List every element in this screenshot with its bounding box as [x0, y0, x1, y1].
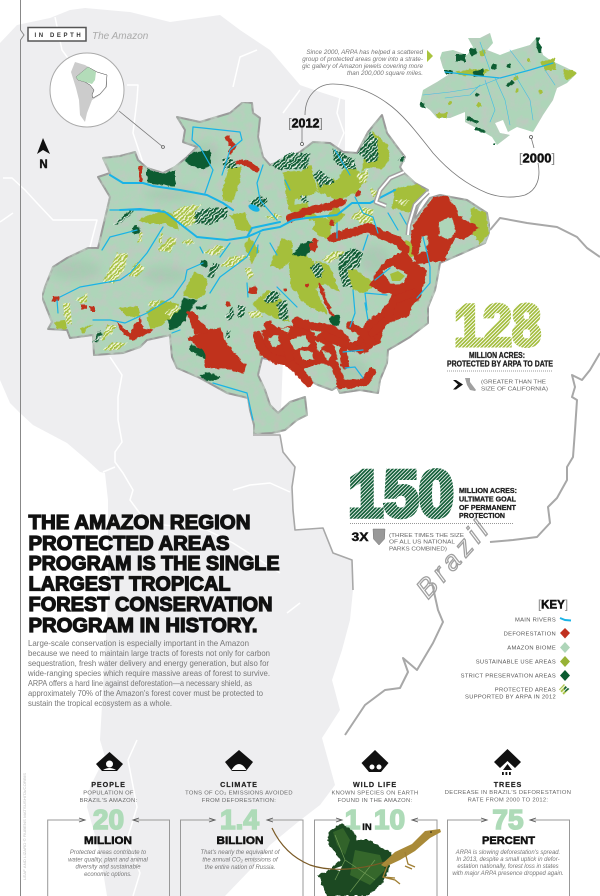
strict preservation areas: [132, 150, 340, 381]
curved connector between maps: [305, 84, 539, 197]
stat: 150 million acres: ULTIMATE GOAL: [459, 494, 517, 504]
key: sustainable use areas: SUSTAINABLE USE AREAS: [476, 660, 556, 666]
stat column: climate: FROM DEFORESTATION:: [202, 798, 276, 804]
stat column: people: Protected areas contribute to: [70, 850, 147, 856]
stat: 150 million acres: 150: [348, 456, 454, 530]
icon: wild life: [362, 750, 388, 772]
stat: 150 million acres: OF PERMANENT: [459, 503, 517, 512]
stat column: climate: 1.4: [220, 804, 259, 835]
section tag: In Depth: [28, 28, 149, 42]
green holes inside deforestation: [268, 217, 456, 362]
estuary channels: [376, 172, 428, 235]
handwritten country label: Brazil: [410, 515, 495, 604]
stat column: trees: PERCENT: [482, 835, 535, 847]
stat column: climate: [180, 750, 303, 896]
stat: 128 million acres: SIZE OF CALIFORNIA): [481, 386, 548, 392]
key: protected areas supported by ARPA: PROTECTED AREAS: [495, 688, 556, 694]
label: 2012: [2012]: [288, 116, 323, 130]
stat column: climate: That's nearly the equivalent of: [200, 850, 281, 856]
stat column: trees: TREES: [494, 780, 522, 789]
stat: 128 million acres: [447, 294, 553, 392]
icon: north arrow: [37, 138, 50, 171]
locator globe with South America: [50, 53, 164, 148]
illustration: leaf: [318, 823, 393, 896]
stat column: wild life: 10: [374, 804, 405, 835]
caption: since 2000: gic gallery of Amazon jewels covering more: [302, 63, 423, 70]
stat column: climate: the annual CO₂ emissions of: [202, 858, 279, 864]
stat column: climate: BILLION: [216, 835, 264, 847]
stat column: trees: 75: [492, 804, 524, 835]
lime patch in red hole: [390, 271, 405, 281]
protected areas supported by ARPA: light hatch: [63, 170, 410, 350]
stat column: wild life: IN: [362, 822, 372, 833]
section tag: In Depth: The Amazon: [92, 31, 149, 42]
stat column: people: BRAZIL'S AMAZON:: [80, 798, 137, 804]
stat column: people: diversity and sustainable: [75, 864, 141, 870]
key: deforestation: DEFORESTATION: [504, 632, 556, 638]
stat: 150 million acres: [348, 456, 517, 552]
headline: THE AMAZON REGION: [28, 511, 250, 534]
deforestation: [52, 138, 479, 385]
icon: climate: [225, 750, 253, 771]
background land: neighbouring countries: [0, 8, 353, 896]
stat column: trees: RATE FROM 2000 TO 2012:: [468, 798, 548, 804]
stat column: trees: estation nationally, forest loss in states: [457, 864, 559, 870]
stat: 128 million acres: MILLION ACRES:: [469, 351, 525, 360]
small map: 2000: [420, 33, 577, 146]
key: protected areas supported by ARPA: SUPPORTED BY ARPA IN 2012: [465, 694, 556, 700]
body paragraph: wide-ranging species which require massive areas of forest to survive.: [27, 668, 270, 678]
stat column: wild life: 1: [345, 804, 360, 835]
stat column: people: PEOPLE: [91, 780, 126, 789]
body paragraph: Large-scale conservation is especially important in the Amazon: [28, 638, 249, 648]
stat: 128 million acres: (GREATER THAN THE: [481, 380, 546, 386]
main rivers: [57, 127, 430, 420]
stat: 150 million acres: (THREE TIMES THE SIZE: [389, 533, 464, 539]
stat column: people: MILLION: [84, 835, 132, 847]
main map: Amazon biome 2012: [42, 102, 490, 434]
strict areas 2000: [420, 38, 542, 146]
stat column: people: 20: [93, 804, 124, 835]
label: 2000: [519, 136, 555, 166]
headline: FOREST CONSERVATION: [28, 593, 272, 616]
stat: 150 million acres: PARKS COMBINED): [389, 546, 447, 552]
stat column: wild life: WILD LIFE: [353, 780, 397, 789]
headline: PROGRAM IN HISTORY.: [28, 614, 258, 637]
headline: [28, 511, 280, 637]
stat column: trees: DECREASE IN BRAZIL'S DEFORESTATION: [445, 790, 571, 796]
sustainable use areas: [54, 131, 489, 333]
stat: 150 million acres: PROTECTION: [459, 511, 505, 520]
icon: national park badge: [373, 529, 385, 545]
map key: [KEY]: [538, 600, 568, 612]
stat column: people: POPULATION OF: [83, 790, 134, 796]
stat column: climate: the entire nation of Russia.: [205, 865, 275, 871]
icon: people: [96, 752, 123, 771]
amazon biome shape: [42, 102, 490, 434]
stat column: climate: TONS OF CO₂ EMISSIONS AVOIDED: [185, 790, 293, 796]
photo credit: LEAF AND LIZARD © RUBENS MATSUSHITA/CORBIS: [22, 773, 27, 880]
icon: north arrow: N: [39, 159, 48, 171]
sustainable areas 2000: [436, 50, 577, 118]
headline: LARGEST TROPICAL: [28, 572, 230, 596]
label: 2000: [2000]: [519, 150, 555, 166]
stat column: trees: with major ARPA presence dropped again.: [452, 871, 564, 877]
section tag: In Depth: IN DEPTH: [34, 33, 83, 39]
stat column: wild life: FOUND IN THE AMAZON:: [338, 798, 412, 804]
stat: 150 million acres: MILLION ACRES:: [459, 486, 517, 495]
caption: since 2000: [302, 49, 423, 77]
illustration: lizard: [272, 828, 441, 884]
icon: greater than chevron: [453, 380, 463, 390]
map key: [461, 600, 571, 700]
headline: PROGRAM IS THE SINGLE: [28, 552, 280, 575]
protected areas supported by ARPA: dark hatch: [93, 132, 405, 343]
stat column: climate: CLIMATE: [220, 780, 258, 789]
left margin rule: [20, 0, 24, 896]
caption: since 2000: Since 2000, ARPA has helped a scattered: [306, 49, 423, 56]
stat column: people: [48, 752, 170, 896]
icon: California: [465, 378, 476, 391]
stat: 150 million acres: OF ALL US NATIONAL: [389, 540, 456, 546]
body paragraph: [27, 638, 270, 708]
caption: since 2000: group of protected areas grow into a strate-: [302, 56, 423, 63]
stat column: wild life: [314, 750, 437, 896]
body paragraph: sustain the tropical ecosystem as a whole.: [28, 698, 172, 708]
body paragraph: sequestration, fresh water delivery and energy generation, but also for: [28, 658, 269, 668]
stat column: wild life: KNOWN SPECIES ON EARTH: [331, 790, 419, 796]
key: strict preservation areas: STRICT PRESERVATION AREAS: [461, 674, 556, 680]
stat: 128 million acres: PROTECTED BY ARPA TO DATE: [447, 360, 553, 368]
biome darker forest shading: [60, 150, 384, 375]
stat column: people: economic options.: [84, 872, 132, 878]
key: amazon biome: AMAZON BIOME: [507, 646, 556, 652]
headline: PROTECTED AREAS: [28, 532, 230, 555]
stat column: trees: In 2013, despite a small uptick in defor-: [456, 857, 560, 863]
caption: since 2000: than 200,000 square miles.: [347, 70, 423, 77]
body paragraph: approximately 70% of the Amazon's forest cover must be protected to: [28, 688, 263, 698]
stat column: trees: ARPA is slowing deforestation's spread.: [455, 850, 560, 856]
body paragraph: ARPA offers a hard line against deforestation—a necessary shield, as: [28, 678, 253, 688]
key: main rivers: MAIN RIVERS: [515, 618, 556, 624]
stat column: people: water quality, plant and animal: [68, 858, 149, 864]
Brazil national outline: [253, 218, 600, 735]
stat column: trees: [445, 749, 571, 896]
icon: trees: [494, 749, 521, 775]
rivers 2000: [423, 42, 555, 125]
pointer triangle: [427, 50, 433, 62]
stat: 150 million acres: 3X: [352, 532, 369, 544]
stat: 128 million acres: 128: [454, 294, 541, 358]
label: 2012: [288, 116, 323, 146]
key: protected areas supported by ARPA: [465, 684, 570, 700]
body paragraph: because we need to maintain large tracts of forests not only for carbon: [28, 648, 270, 658]
